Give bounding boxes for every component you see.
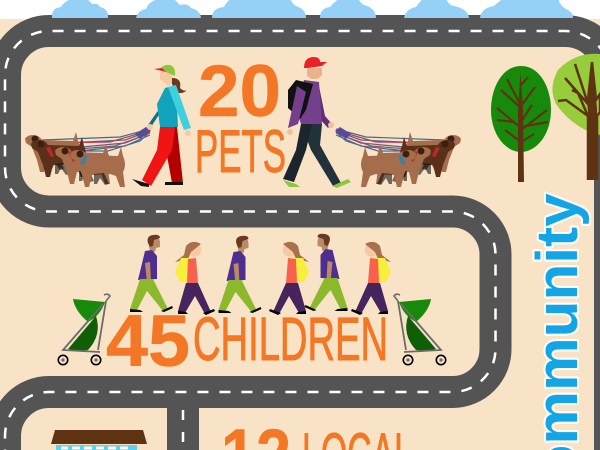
left stroller xyxy=(58,294,110,365)
left dogs xyxy=(25,127,151,187)
children walking xyxy=(130,234,391,315)
man walker xyxy=(283,57,351,188)
title: 12 local xyxy=(221,415,413,450)
tree: dark green xyxy=(491,66,551,182)
right stroller xyxy=(394,294,446,365)
title: 20 pets xyxy=(195,51,286,185)
title: 45 children xyxy=(106,301,388,382)
title: 45 children: 45 xyxy=(106,301,190,382)
title: 45 children: CHILDREN xyxy=(193,305,388,373)
building xyxy=(51,430,147,450)
tree: light green xyxy=(552,54,600,180)
title: 20 pets: PETS xyxy=(195,118,286,185)
right dogs xyxy=(335,127,461,187)
clouds xyxy=(52,0,573,18)
woman walker xyxy=(132,65,191,187)
title: 20 pets: 20 xyxy=(198,51,281,132)
